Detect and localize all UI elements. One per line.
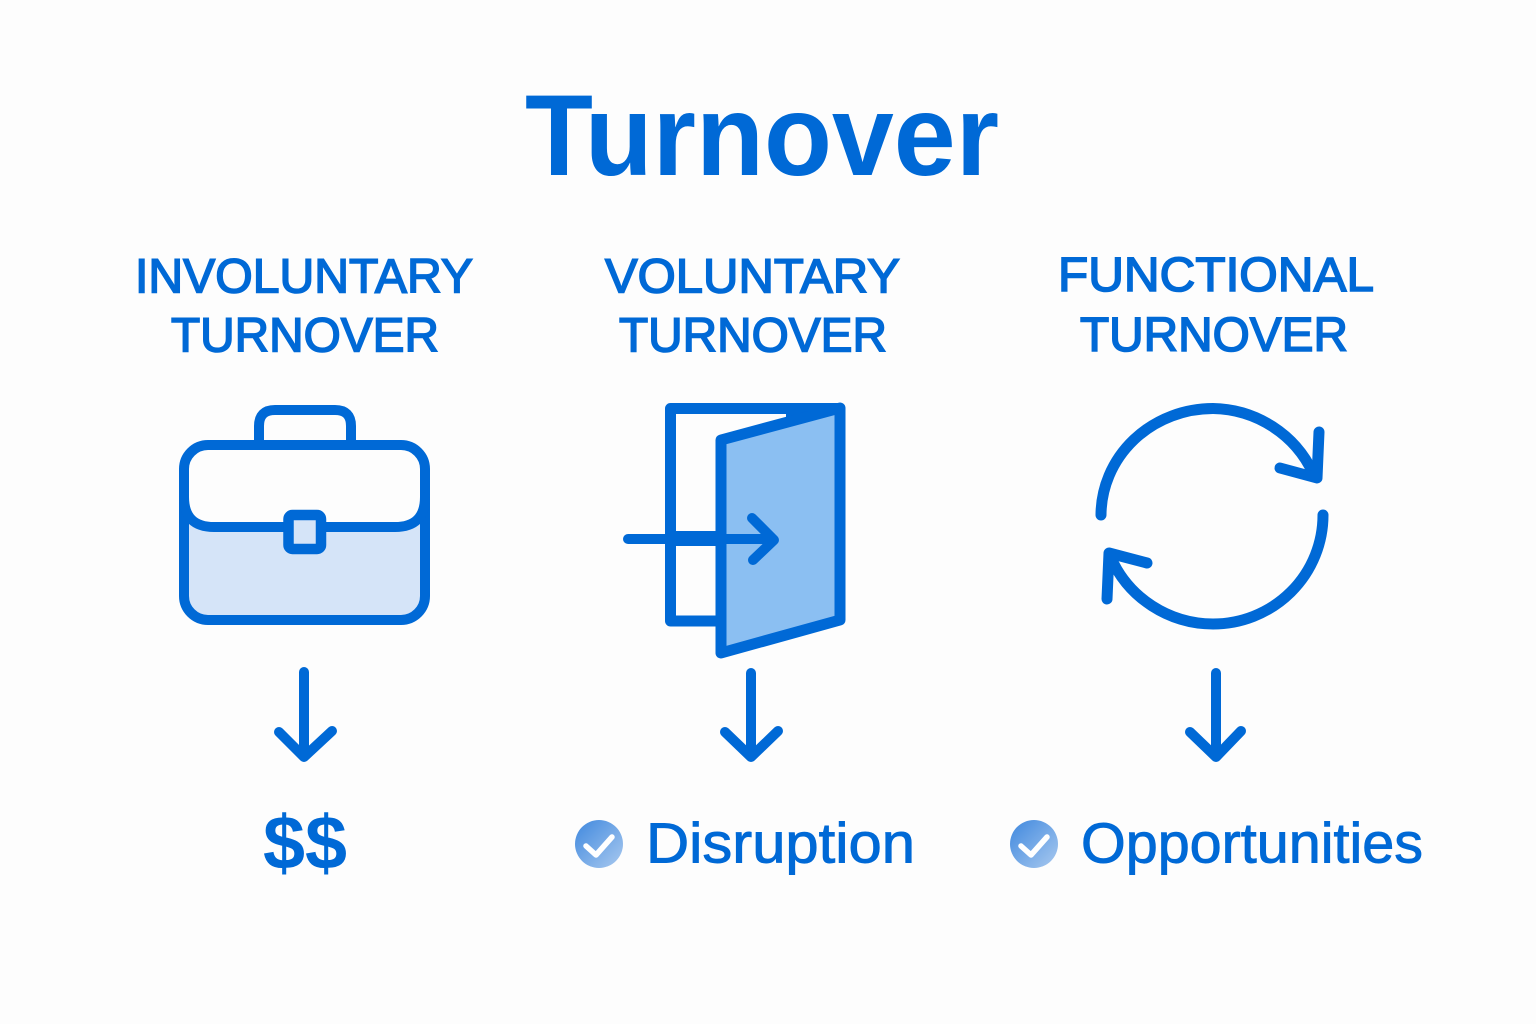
heading: voluntary turnover	[605, 250, 900, 362]
cost symbol: $$	[263, 801, 347, 886]
arrow: functional to opportunities	[1190, 673, 1241, 757]
heading: involuntary turnover	[135, 250, 473, 362]
result: opportunities: Opportunities	[1081, 812, 1423, 876]
heading: voluntary turnover: VOLUNTARY	[605, 250, 900, 304]
heading: functional turnover: FUNCTIONAL	[1058, 249, 1374, 302]
heading: functional turnover	[1058, 249, 1374, 362]
icon: check badge	[575, 820, 623, 868]
panel: involuntary turnover	[135, 250, 473, 886]
arrow: involuntary to cost	[279, 672, 332, 757]
title: Turnover	[525, 72, 999, 200]
result: disruption: Disruption	[646, 812, 915, 876]
icon: check badge	[1010, 820, 1058, 868]
panel: functional turnover	[1010, 249, 1423, 876]
icon: refresh cycle	[1101, 408, 1323, 624]
heading: functional turnover: TURNOVER	[1080, 309, 1348, 362]
heading: voluntary turnover: TURNOVER	[619, 310, 887, 362]
arrow: voluntary to disruption	[725, 673, 778, 757]
panel: voluntary turnover	[575, 250, 915, 876]
heading: involuntary turnover: INVOLUNTARY	[135, 250, 473, 304]
heading: involuntary turnover: TURNOVER	[171, 310, 439, 362]
icon: briefcase	[184, 410, 425, 620]
icon: open door with arrow	[628, 408, 840, 653]
